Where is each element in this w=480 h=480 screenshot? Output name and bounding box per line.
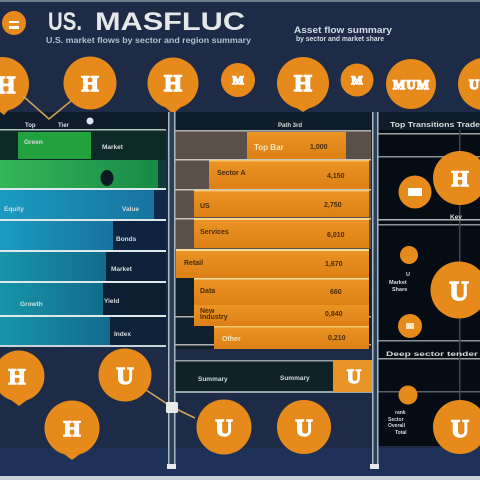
circle e — [398, 314, 422, 338]
logo badge — [2, 11, 26, 35]
row 3 — [0, 252, 166, 281]
bottom circle 4 — [196, 400, 252, 454]
center panel — [175, 130, 371, 349]
circle b: H — [451, 166, 469, 191]
row 4: Yield — [104, 298, 119, 305]
top right note — [294, 25, 392, 43]
circle 3 — [148, 58, 198, 114]
circle 7 — [386, 59, 436, 109]
circle 3: H — [164, 71, 182, 96]
bottom circle 4: U — [215, 416, 233, 442]
side note — [389, 272, 410, 293]
column labels — [25, 118, 480, 129]
title: US. — [48, 8, 82, 36]
circle 4: M — [232, 73, 244, 87]
bar 1: Top Bar — [254, 143, 284, 152]
column labels: Top — [25, 123, 36, 129]
connector lines — [23, 96, 71, 119]
bar 5: 1,670 — [325, 261, 343, 268]
circle 6 — [340, 64, 374, 96]
bottom circle 2 — [98, 348, 152, 402]
row 1 — [0, 190, 166, 219]
circle 7: MUM — [393, 77, 429, 92]
center lower panel — [175, 360, 373, 393]
row 3: Market — [111, 266, 133, 273]
circle 5: H — [294, 71, 312, 96]
row 4 — [0, 283, 166, 315]
bar 4: Services — [200, 229, 229, 236]
green header note: Market — [102, 144, 124, 151]
bar 6 — [194, 278, 369, 305]
orange square — [333, 360, 373, 392]
lower note: Total — [395, 430, 407, 436]
circle 2 — [64, 56, 116, 110]
bar 6: Data — [200, 288, 215, 295]
bottom circle 1: H — [8, 364, 26, 389]
circle d: U — [449, 276, 469, 306]
circle 5 — [277, 57, 329, 112]
left table — [0, 129, 166, 347]
black marker — [100, 170, 114, 186]
bottom connector — [146, 390, 195, 418]
axis right — [370, 112, 379, 469]
orange square: U — [347, 366, 361, 388]
row 5: Index — [114, 331, 131, 338]
column labels: Path 3rd — [278, 123, 302, 129]
top right note: Asset flow summary — [294, 25, 392, 35]
green header cell — [18, 132, 91, 159]
row 2: Bonds — [116, 236, 137, 243]
bottom circle 5: U — [295, 416, 313, 442]
circle g — [433, 400, 480, 454]
circle 2: H — [81, 71, 99, 96]
lower note — [388, 410, 407, 436]
column labels: Top Transitions Trade — [390, 122, 480, 129]
bar 2: Sector A — [217, 170, 246, 177]
row 5 — [0, 317, 166, 345]
circle 1 — [0, 57, 29, 115]
legend text: Deep sector tender — [386, 351, 479, 358]
header band — [0, 112, 480, 130]
circle g: U — [451, 416, 469, 443]
bar 1: 1,000 — [310, 144, 328, 151]
bar 3: US — [200, 203, 210, 210]
bottom circle 5 — [277, 400, 331, 454]
top right note: by sector and market share — [296, 36, 384, 43]
circle 6: M — [351, 73, 363, 87]
lower note: Sector — [388, 417, 404, 423]
bar 5: Retail — [184, 260, 203, 267]
lower note: Overall — [388, 423, 406, 429]
title: MASFLUC — [95, 8, 245, 36]
bottom circle 2: U — [116, 364, 134, 390]
row 4: Growth — [20, 301, 43, 308]
side note: Share — [392, 287, 407, 293]
bottom circle 1 — [0, 350, 44, 406]
row 1: Equity — [4, 206, 24, 213]
bar 2 — [209, 160, 369, 189]
bottom circle 3 — [44, 400, 100, 460]
bar 8: Other — [222, 336, 241, 343]
subtitle: U.S. market flows by sector and region summary — [46, 36, 252, 45]
circle b — [433, 151, 480, 205]
bar 7: New — [200, 308, 215, 315]
bottom circle 3: H — [63, 416, 81, 441]
axis left — [167, 112, 176, 469]
side note: Market — [389, 280, 407, 286]
bar 4 — [194, 218, 369, 248]
bar 8: 0,210 — [328, 335, 346, 342]
green header cell: Green — [24, 139, 43, 146]
circle c — [400, 246, 418, 264]
bar 7: 0,840 — [325, 311, 343, 318]
bar 3 — [194, 190, 369, 217]
bar 7 — [194, 305, 369, 326]
bar 3: 2,750 — [324, 202, 342, 209]
circle d — [430, 262, 480, 318]
green row — [0, 160, 166, 188]
bottom circles — [0, 348, 331, 460]
lower label right: Summary — [280, 375, 310, 382]
bar 2: 4,150 — [327, 173, 345, 180]
title — [48, 8, 245, 36]
circle f — [398, 386, 418, 404]
circle 8 — [458, 58, 480, 110]
bar 5 — [176, 249, 369, 278]
lower note: rank — [395, 410, 406, 416]
bar 8 — [214, 326, 369, 349]
bottom band — [0, 448, 480, 476]
bar 7: Industry — [200, 314, 228, 321]
column labels: Tier — [58, 123, 70, 129]
bar 6: 660 — [330, 289, 342, 296]
bar 1 — [247, 132, 346, 159]
top circle row — [0, 56, 480, 115]
right panel — [378, 130, 480, 454]
circle 4 — [221, 63, 255, 97]
row 1: Value — [122, 206, 139, 213]
panel labels: Key — [450, 214, 462, 221]
row 2 — [0, 221, 166, 250]
circle 8: U — [469, 78, 479, 93]
lower label left: Summary — [198, 376, 228, 383]
circle a — [398, 176, 432, 208]
bar 4: 6,010 — [327, 232, 345, 239]
side note: U — [406, 272, 410, 278]
